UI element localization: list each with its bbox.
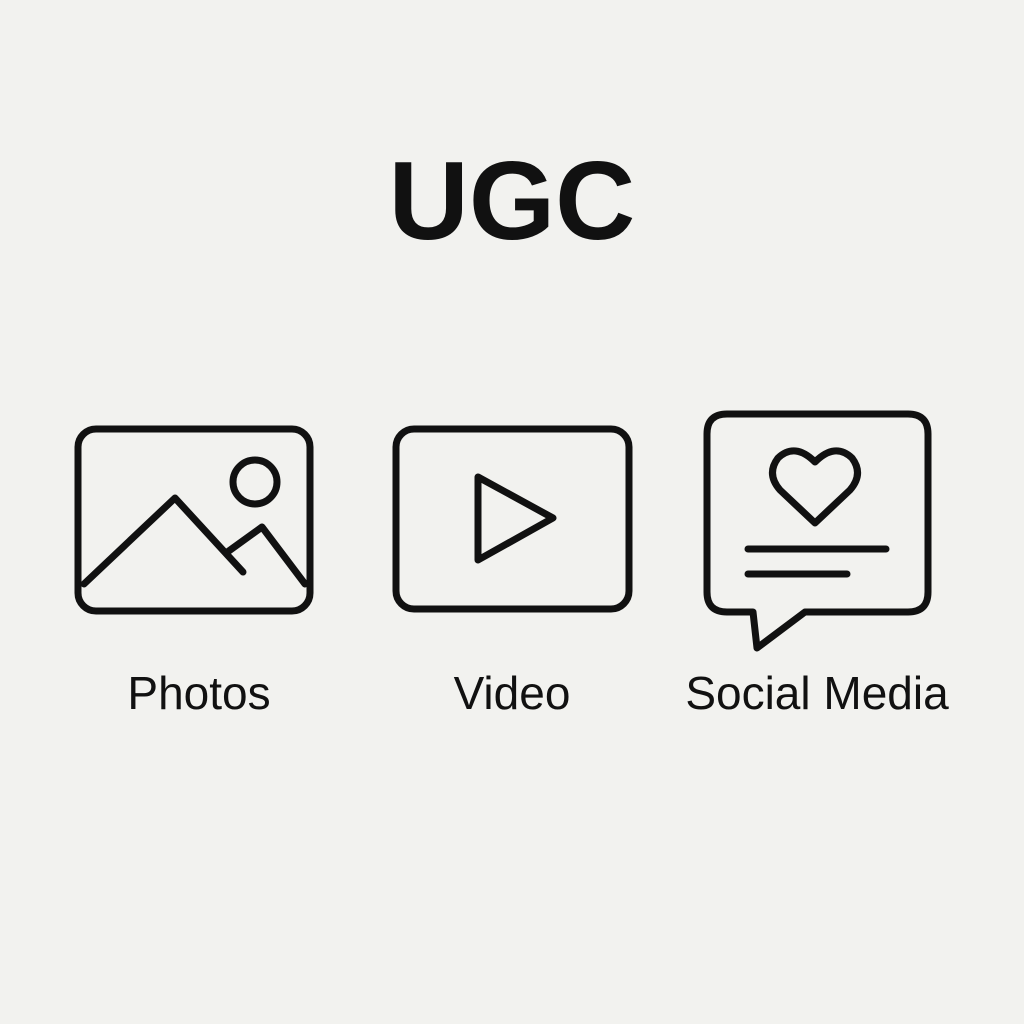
title: UGC xyxy=(389,139,635,263)
label: social media: Social Media xyxy=(685,667,949,719)
label: video: Video xyxy=(454,667,570,719)
label: photos: Photos xyxy=(127,667,271,719)
